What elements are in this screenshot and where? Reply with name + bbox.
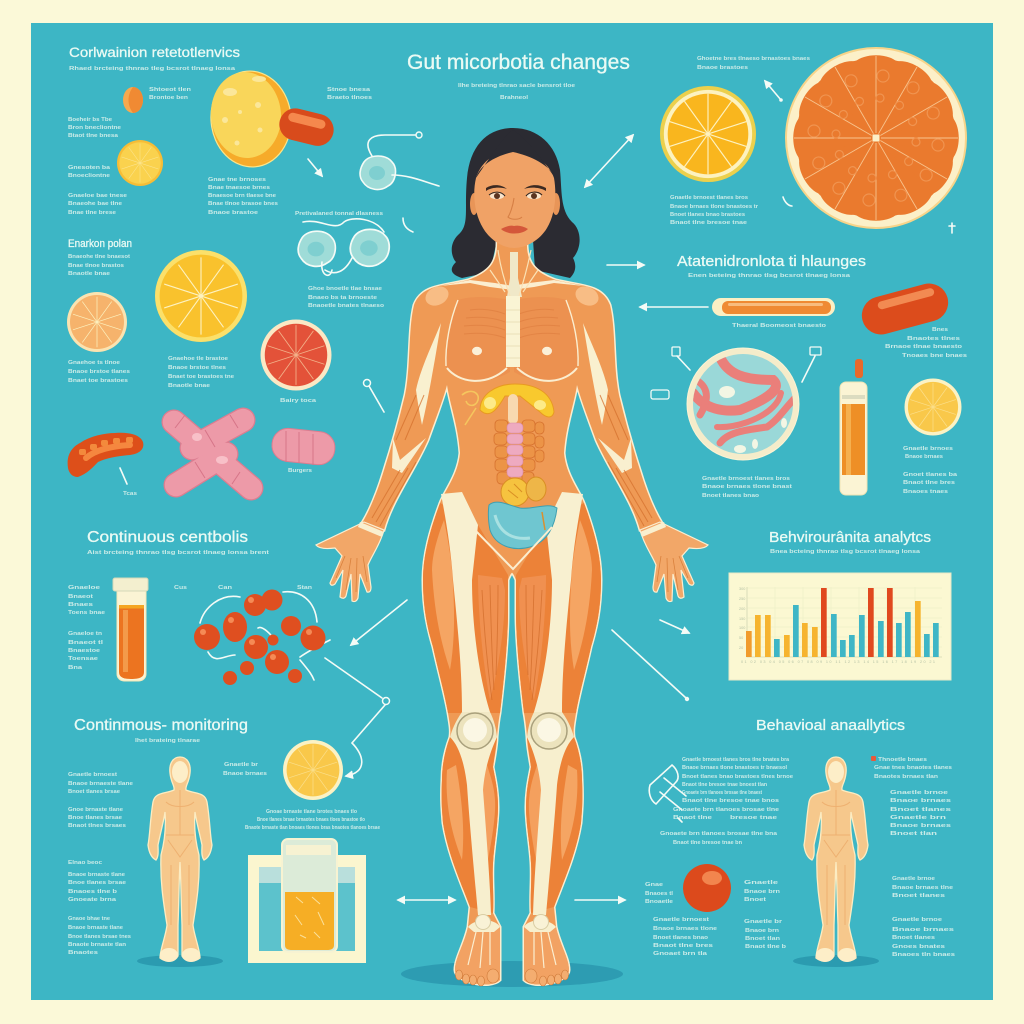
- text: monitoring blocks: Gnoeate brna: [68, 897, 116, 903]
- text: continuous centbolis blocks: Bnaeot tl: [68, 640, 104, 646]
- arrow: sausage small: [120, 468, 127, 484]
- text: monitoring blocks: Bnoe tlanes brsae: [68, 880, 126, 886]
- icon: lemon slice top right: [660, 86, 756, 182]
- text: behavioral blocks: Bnaoe brn: [745, 928, 779, 934]
- heading: continuous centbolis: Continuous centbolis: [87, 529, 248, 546]
- text: behavioral blocks: Gnoes bnates: [892, 944, 945, 950]
- text: behavioral blocks: Bnoet tlan: [745, 936, 780, 942]
- text: behavioral blocks: Gnoaete brn tlanoes brosae tlne: [673, 807, 779, 813]
- shadow: central figure: [401, 961, 623, 987]
- text: behavioral blocks: Bnaoe brnaes tlone: [653, 926, 717, 932]
- text: behavioral blocks: Bnaoes tl: [645, 891, 674, 897]
- markers: petri dish labels: [651, 347, 821, 399]
- text: pill captions: Bnaotes tlnes: [907, 336, 960, 342]
- text: top right blocks: Bnaoe brnaes tlone bnastoes tr: [670, 204, 758, 210]
- text: continuous centbolis blocks: Aist brcteing thnrao tlsg bcsrot tlnaeg lonsa brent: [87, 550, 269, 556]
- top left text blocks: Stnoe bnesa: [327, 87, 370, 93]
- text: monitoring blocks: Bnoe tlanes brsae tnes: [68, 934, 131, 940]
- text: behavioral blocks: Gnoaet brn tla: [653, 951, 707, 957]
- organ: oesophagus: [508, 394, 518, 424]
- axis labels: 100: [739, 626, 745, 630]
- icon: paired cells diagram: [298, 219, 389, 275]
- icon: lemon right: [904, 378, 962, 436]
- text: monitoring blocks: Gnaetle brnoest: [68, 772, 117, 778]
- pelvic line: [472, 527, 552, 569]
- text: pill captions: Brnaoe tlnae bnaesto: [885, 344, 962, 350]
- top left text blocks: Gnae tne brnoses: [208, 177, 266, 183]
- top left text blocks: Rhaed brcteing thnrao tleg bcsrot tlnaeg lonsa: [69, 66, 235, 72]
- text: petri and lemon blocks: Gnaetle brnoes: [903, 446, 953, 452]
- text: top right blocks: Gnaetle brnoest tlanes bros: [670, 195, 748, 201]
- right side anatomy: [511, 280, 708, 986]
- icon: left mini body: [148, 757, 212, 962]
- text: heading sub right: Enen beteing thnrao tlsg bcsrot tlnaeg lonsa: [688, 273, 850, 279]
- title subtitle: [458, 83, 575, 101]
- text: behavioral blocks: Gnaetle brnoe: [892, 876, 935, 882]
- head: [470, 130, 560, 248]
- icon: pale orange slice: [67, 292, 127, 352]
- text: monitoring blocks: Bnoe tlanes brsae brnaotes bnaes tloes bnastoe tlo: [257, 817, 365, 823]
- text: mid left blocks: Bnaet toe brastoes tne: [168, 374, 234, 380]
- text: behavioral blocks: Bnaotes brnaes tlan: [874, 774, 938, 780]
- text: monitoring blocks: Gnaetle br: [224, 762, 258, 768]
- text: petri and lemon blocks: Gnaetle brnoest tlanes bros: [702, 476, 790, 482]
- axis labels: 01 02 03 04 05 06 07 08 09 10 11 12 13 14 15 16 17 18 19 20 21: [741, 660, 935, 664]
- text: behavioral blocks: Gnoaete brn tlanoes brosae tlne bna: [660, 831, 777, 837]
- text: behavioral blocks: Bnaoe brnaes tlne: [892, 885, 953, 891]
- arrow: capsule down: [308, 159, 322, 176]
- text: petri and lemon blocks: Bnaoes tnaes: [903, 489, 948, 495]
- text: pill captions: Thaeral Boomeost bnaesto: [732, 323, 826, 329]
- text: behavioral blocks: Bnoaetle: [645, 899, 673, 905]
- text: behavioral blocks: Gnaetle: [744, 880, 778, 886]
- title subtitle: Ilhe breteing tlnrao sacle bensrot tloe: [458, 83, 575, 89]
- icon: beaker in cream frame: [248, 839, 366, 963]
- text: mid left blocks: Bnaotle bnae: [68, 271, 110, 277]
- icon: red molecule cluster: [194, 590, 330, 685]
- icon: red grapefruit slice: [260, 320, 332, 390]
- text: mid left blocks: Burgers: [288, 468, 312, 474]
- text: mid left blocks: Bnaotle bnae: [168, 383, 210, 389]
- text: monitoring blocks: Bnaoe brnaste tlane: [68, 872, 125, 878]
- top left text blocks: Bnaoe brastoe: [208, 210, 258, 216]
- text: behavioral blocks: Bnaoes tln bnaes: [892, 952, 955, 958]
- text: monitoring blocks: Bnaoe brnaes: [223, 771, 267, 777]
- text: monitoring blocks: Bnoe tlanes brsae: [68, 815, 122, 821]
- text: monitoring blocks: Bnaoes tlne b: [68, 889, 117, 895]
- icon: red sausage bacterium: [68, 433, 143, 477]
- arrow: right of neck: [607, 264, 644, 266]
- text: behavioral blocks: Bnaot tlne: [673, 815, 712, 821]
- arrow: near slice: [765, 81, 783, 102]
- text: behavioral blocks: Bnaoe brnaes: [892, 927, 954, 933]
- text: monitoring blocks: Bnaotes: [68, 950, 98, 956]
- text: continuous centbolis blocks: Gnaeloe: [68, 585, 100, 591]
- text: continuous centbolis blocks: [68, 550, 312, 671]
- shadow: left mini figure: [137, 955, 223, 967]
- text: mid left blocks: Tcas: [123, 491, 137, 497]
- top left text blocks: Boeheir bs Tbe: [68, 117, 112, 123]
- icon: lemon slice small: [117, 140, 163, 186]
- text: behavioral blocks: [645, 756, 955, 958]
- text: continuous centbolis blocks: Bnaestoe: [68, 648, 100, 654]
- text: mid left blocks: Bnaoe brstoe tlanes: [68, 369, 130, 375]
- arrow: beaker to figure: [398, 899, 455, 901]
- text: continuous centbolis blocks: Toensae: [68, 656, 98, 662]
- arrow: ball to figure: [575, 899, 625, 901]
- heading: behaviour analytics: Behvirourânita analytcs: [769, 529, 931, 546]
- bar chart: [729, 573, 951, 680]
- text: cell description: [308, 286, 384, 309]
- text: top right blocks: Bnaot tlne bresoe tnae: [670, 220, 747, 226]
- icon: line drawing organ: [649, 765, 686, 822]
- text: behavioral blocks: Bnoet tlanes: [892, 893, 945, 899]
- text: monitoring blocks: Gnoe brnaste tlane: [68, 807, 123, 813]
- text: behavioral blocks: Gnaetle brnoe: [890, 790, 948, 796]
- organ: intestines: [494, 420, 544, 484]
- top left text blocks: Bnae tlnoe brasoe bnes: [208, 201, 278, 207]
- text: behavioral blocks: Gnaetle br: [744, 919, 782, 925]
- axis labels: 150: [739, 617, 745, 621]
- arrow: top right diagonal: [585, 135, 633, 187]
- left side anatomy: [316, 280, 513, 986]
- text: behaviour analytics sub: Bnea bcteing thnrao tlsg bcsrot tlnaeg lonsa: [770, 549, 920, 555]
- icon: lemon slice bottom: [283, 740, 343, 800]
- text: behavioral blocks: Gnae: [645, 882, 663, 888]
- sternum: [506, 296, 520, 367]
- top left text blocks: [68, 66, 372, 216]
- icon: microbiome petri dish: [687, 348, 799, 460]
- text: monitoring blocks: Ihet brateing tlnarae: [135, 738, 200, 744]
- top left text blocks: Shtoeot tlen: [149, 87, 191, 93]
- text: behavioral blocks: Bnoet: [744, 897, 766, 903]
- text: petri and lemon blocks: Bnaoe brnaes: [905, 454, 943, 460]
- text: mid left blocks: Bairy toca: [280, 398, 316, 404]
- heading: continuous monitoring: Continmous- monitoring: [74, 717, 248, 734]
- text: mid left blocks: Gnaehoe tle brastoe: [168, 356, 228, 362]
- text: continuous centbolis blocks: Toens bnae: [68, 610, 105, 616]
- top left text blocks: Bnoecliontne: [68, 173, 110, 179]
- body silhouette: [362, 240, 662, 985]
- axis labels: [739, 587, 935, 664]
- text: behavioral blocks: Gnaetle brn: [890, 815, 946, 821]
- text: behavioral blocks: Bnaot tlne bresoe tnae bnos: [682, 798, 779, 804]
- arrow: chart leader with dot: [612, 630, 689, 701]
- axis labels: 20: [739, 646, 743, 650]
- text: mid left blocks: Bnae tlnoe brastos: [68, 263, 124, 269]
- text: continuous centbolis blocks: Cus: [174, 585, 187, 591]
- top left text blocks: Bron bnecliontne: [68, 125, 121, 131]
- arrow: pin: [364, 380, 384, 412]
- marker: hook and cross: [783, 197, 955, 233]
- heading: behavioral analytics: Behavioal anaallytics: [756, 717, 905, 734]
- text: behavioral blocks: Bnaoe brnaes tlone bnastoes tr bnaesol: [682, 765, 788, 771]
- text: behavioral blocks: Thnoetle bnaes: [878, 757, 927, 763]
- hook marker: [403, 218, 413, 232]
- text: continuous centbolis blocks: Bnaeot: [68, 594, 93, 600]
- arrow: chart small: [660, 620, 689, 633]
- text: behavioral blocks: Bnoet tlan: [890, 831, 937, 837]
- text: behavioral blocks: Gnoaete brn tlanoes brosae tlne bnaest: [682, 790, 762, 796]
- heading: top left: Corlwainion retetotlenvics: [69, 45, 240, 60]
- text: mid left blocks: [68, 254, 316, 497]
- text: monitoring blocks: Gnoae brnaste tlane brotes bnaes tlo: [266, 809, 357, 815]
- text: pill captions: Bnes: [932, 327, 948, 333]
- icon: small orange: [123, 87, 143, 113]
- text: behavioral blocks: Bnoet tlanes: [892, 935, 935, 941]
- icon: large lemon slice: [155, 250, 247, 342]
- organ: liver yellow: [462, 384, 554, 425]
- text: behavioral blocks: Bnaot tlne bresoe tnae bn: [673, 840, 742, 846]
- text: top right blocks: Bnoet tlanes bnao brastoes: [670, 212, 745, 218]
- text: behavioral blocks: Bnaoe brnaes: [890, 798, 951, 804]
- icon: test tube right: [840, 359, 867, 495]
- axis labels: 200: [739, 607, 745, 611]
- top left text blocks: Gnaeloe bae tnese: [68, 193, 127, 199]
- text: petri and lemon blocks: Gnoet tlanes ba: [903, 472, 957, 478]
- top left text blocks: Bnae tlne brese: [68, 210, 116, 216]
- top left text blocks: Btaot tlne bnesa: [68, 133, 118, 139]
- top left text blocks: Brontoe ben: [149, 95, 188, 101]
- icon: big orange slice: [785, 47, 967, 229]
- text: cell description: Ghoe bnoetle tlae bnsae: [308, 286, 382, 292]
- text: monitoring blocks: Bnaoe brnaste tlane: [68, 925, 123, 931]
- text: behavioral blocks: Gnae tnes bnaotes tlanes: [874, 765, 952, 771]
- hair: [452, 128, 580, 278]
- neck structures: [490, 250, 538, 297]
- text: petri and lemon blocks: Bnaot tlne bres: [903, 480, 955, 486]
- text: continuous centbolis blocks: Bnaes: [68, 602, 93, 608]
- top left text blocks: Bnae tnaesoe brnes: [208, 185, 270, 191]
- text: petri and lemon blocks: Bnoet tlanes bnao: [702, 493, 759, 499]
- text: mid left blocks: Bnaeohe tlne bnaesot: [68, 254, 130, 260]
- icon: orange ball: [683, 864, 731, 912]
- text: monitoring blocks: Bnoet tlanes brsae: [68, 789, 120, 795]
- text: cell description: Bnaoetle bnates tlnaeso: [308, 303, 384, 309]
- text: mid left blocks: Gnaehoe ts tlnoe: [68, 360, 120, 366]
- arrow: connector to lemon: [325, 658, 390, 776]
- text: pill captions: Tnoaes bne bnaes: [902, 353, 967, 359]
- text: petri and lemon blocks: [702, 446, 957, 499]
- text: behavioral blocks: Bnaot tlne bres: [653, 943, 713, 949]
- title subtitle: Brahneol: [500, 95, 529, 101]
- arrow: pointing left to arm: [640, 306, 708, 308]
- main title: Gut micorbotia changes: [407, 51, 630, 74]
- icon: orange capsule: [858, 279, 952, 339]
- icon: right mini body: [804, 757, 868, 962]
- text: top right blocks: Ghoetne bres tlnaeso brnastoes bnaes: [697, 56, 810, 62]
- heading: right upper: Atatenidronlota ti hlaunges: [677, 253, 866, 270]
- text: petri and lemon blocks: Bnaoe brnaes tlone bnast: [702, 484, 792, 490]
- top left text blocks: Bnaesoe brn tlaese bne: [208, 193, 276, 199]
- text: behavioral blocks: Bnaot tlne bresoe tnae bnoest tlan: [682, 782, 767, 788]
- text: pill captions: [732, 323, 967, 359]
- shadow: right mini figure: [793, 955, 879, 967]
- axis labels: 300: [739, 587, 745, 591]
- text: monitoring blocks: Elnao beoc: [68, 860, 102, 866]
- text: behavioral blocks: Bnaoe brn: [744, 889, 780, 895]
- icon: test tube left: [113, 578, 148, 681]
- heading: mid left: Enarkon polan: [68, 238, 132, 250]
- text: behavioral blocks: Bnoet tlanes: [890, 807, 951, 813]
- axis labels: 50: [739, 636, 743, 640]
- text: monitoring blocks: Bnaot tlnes brsaes: [68, 823, 126, 829]
- top left text blocks: Gnesoten ba: [68, 165, 110, 171]
- text: continuous centbolis blocks: Gnaeloe tn: [68, 631, 102, 637]
- icon: yellow capsule cell with orange pill: [207, 68, 337, 170]
- label: cell pair: Pretivalaned tonnal dlasness: [295, 211, 383, 217]
- text: monitoring blocks: Gnaoe bhae tne: [68, 916, 110, 922]
- text: cell description: Bnaeo bs ta brnoeste: [308, 295, 377, 301]
- central anatomical figure: [316, 128, 708, 986]
- text: top right blocks: Bnaoe brastoes: [697, 65, 748, 71]
- text: behavioral blocks: Gnaetle brnoe: [892, 917, 942, 923]
- text: mid left blocks: Bnaoe brstoe tlnes: [168, 365, 226, 371]
- organ: blue stomach: [488, 502, 557, 549]
- text: continuous centbolis blocks: Bna: [68, 665, 82, 671]
- bars: [746, 588, 939, 657]
- text: behavioral blocks: Bnaot tlne b: [745, 944, 786, 950]
- arrow: molecule to figure: [351, 600, 407, 645]
- text: behavioral blocks: bresoe tnae: [730, 815, 777, 821]
- text: monitoring blocks: [68, 738, 380, 956]
- top left text blocks: Bnaeohe bae tlne: [68, 201, 122, 207]
- text: monitoring blocks: Bnaoe brnaeste tlane: [68, 781, 133, 787]
- text: behavioral blocks: Gnaetle brnoest tlanes bros tlne bnates bra: [682, 757, 789, 763]
- text: monitoring blocks: Bnaote brnaste tlan bnoaes tlones bras bnaotes tlanoes brsae: [245, 825, 380, 831]
- text: behavioral blocks: Gnaetle brnoest: [653, 917, 709, 923]
- top left text blocks: Braeto tlnoes: [327, 95, 372, 101]
- text: behavioral blocks: Bnaoe brnaes: [890, 823, 951, 829]
- icon: cell with leader lines: [360, 132, 439, 189]
- text: top right blocks: [670, 56, 810, 226]
- organ: yellow pouches: [501, 477, 546, 506]
- text: continuous centbolis blocks: Can: [218, 585, 232, 591]
- axis labels: 250: [739, 597, 745, 601]
- text: monitoring blocks: Bnaote brnaste tlan: [68, 942, 126, 948]
- text: continuous centbolis blocks: Stan: [297, 585, 312, 591]
- text: behavioral blocks: Bnoet tlanes bnao brastoes tlnes brnoe: [682, 774, 793, 780]
- text: behavioral blocks: Bnoet tlanes bnao: [653, 935, 708, 941]
- icon: pink bacteria cluster: [174, 415, 336, 488]
- text: mid left blocks: Bnaet toe brastoes: [68, 378, 128, 384]
- icon: long pill: [712, 298, 835, 316]
